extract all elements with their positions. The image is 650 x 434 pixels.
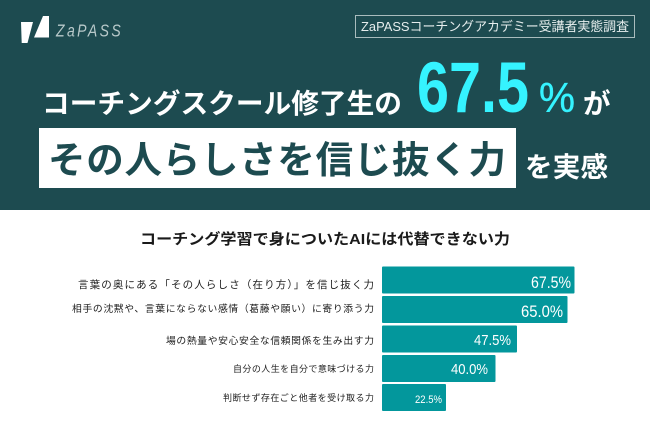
stat: 67.5%: % — [539, 74, 575, 121]
row 1 — [78, 266, 574, 294]
row 3: 47.5% — [474, 332, 511, 349]
row 2 — [72, 296, 568, 323]
row 2: 相手の沈黙や、言葉にならない感情（葛藤や願い）に寄り添う力 — [72, 302, 374, 315]
row 3 — [166, 326, 517, 352]
headline line 1: コーチングスクール修了生の — [42, 88, 402, 119]
survey label — [356, 16, 634, 38]
row 3: 場の熱量や安心安全な信頼関係を生み出す力 — [166, 334, 374, 347]
row 1: 言葉の奥にある「その人らしさ（在り方）」を信じ抜く力 — [78, 278, 374, 291]
logo: ZaPASS — [21, 16, 121, 43]
survey label: ZaPASSコーチングアカデミー受講者実態調査 — [361, 19, 629, 34]
logo: ZaPASS: ZaPASS — [55, 21, 121, 41]
row 5: 22.5% — [415, 394, 442, 406]
row 2: 65.0% — [521, 302, 563, 321]
row 4 — [233, 355, 496, 382]
headline line 1 — [42, 49, 610, 128]
headline line 2 highlight — [39, 128, 516, 188]
stat: 67.5%: 67.5 — [417, 49, 529, 128]
headline line 2 highlight: その人らしさを信じ抜く力 — [48, 139, 506, 181]
row 4: 40.0% — [451, 361, 488, 378]
bar chart — [72, 266, 574, 411]
row 5 — [223, 384, 446, 411]
headline suffix: を実感 — [525, 152, 608, 182]
row 4: 自分の人生を自分で意味づける力 — [233, 363, 374, 374]
chart title: コーチング学習で身についたAIには代替できない力 — [140, 230, 510, 248]
headline line 1: が — [583, 88, 610, 119]
row 1: 67.5% — [531, 273, 571, 292]
row 5: 判断せず存在ごと他者を受け取る力 — [223, 392, 374, 403]
panel: header — [0, 0, 650, 210]
